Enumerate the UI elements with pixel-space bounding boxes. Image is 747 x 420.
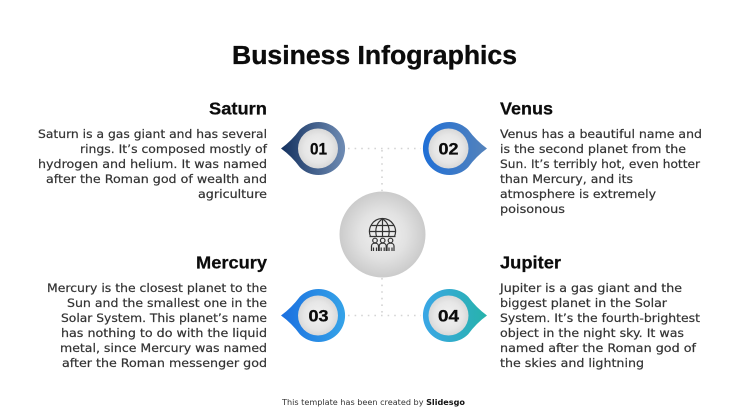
panel: Mercury: Mercury — [196, 252, 267, 272]
panel: Venus: poisonous — [500, 202, 565, 216]
marker 01 — [281, 122, 345, 175]
dotted connectors — [348, 148, 421, 316]
panel: Jupiter: object in the night sky. It was — [500, 326, 684, 340]
panel: Jupiter: biggest planet in the Solar — [500, 296, 667, 310]
panel: Saturn — [38, 98, 268, 201]
marker 02: 02 — [438, 140, 458, 158]
panel: Saturn: Saturn — [209, 98, 267, 118]
panel: Jupiter: Jupiter is a gas giant and the — [499, 281, 682, 295]
panel: Mercury: after the Roman messenger god — [62, 356, 267, 370]
panel: Jupiter: Jupiter — [500, 252, 561, 272]
title: Business Infographics — [232, 42, 517, 70]
marker 01: 01 — [310, 140, 327, 158]
panel: Venus: Sun. It’s terribly hot, even hotter — [500, 157, 700, 171]
marker 04: 04 — [438, 306, 460, 326]
panel: Jupiter: System. It’s the fourth-brightest — [500, 311, 701, 325]
marker 04 — [423, 289, 487, 342]
panel: Mercury — [47, 252, 267, 370]
panel: Mercury: metal, since Mercury was named — [60, 341, 267, 355]
marker 03: 03 — [308, 306, 328, 326]
panel: Jupiter — [499, 252, 701, 370]
panel: Venus — [500, 98, 702, 216]
center circle with globe and people icon — [340, 192, 426, 278]
panel: Jupiter: the skies and lightning — [500, 356, 644, 370]
icon: globe and people — [370, 218, 396, 251]
marker 02 — [423, 122, 487, 175]
panel: Venus: atmosphere is extremely — [500, 187, 656, 201]
panel: Mercury: has nothing to do with the liquid — [61, 326, 267, 340]
panel: Venus: Venus has a beautiful name and — [500, 127, 702, 141]
panel: Mercury: Sun and the smallest one in the — [67, 296, 267, 310]
panel: Mercury: Mercury is the closest planet to the — [47, 281, 267, 295]
panel: Saturn: agriculture — [198, 187, 267, 201]
panel: Saturn: after the Roman god of wealth and — [46, 172, 267, 186]
marker 03 — [281, 289, 345, 342]
footer credit: This template has been created by Slidesgo — [281, 398, 465, 407]
panel: Saturn: hydrogen and helium. It was named — [38, 157, 267, 171]
panel: Venus: than Mercury, and its — [500, 172, 633, 186]
panel: Mercury: Solar System. This planet’s name — [61, 311, 267, 325]
panel: Saturn: rings. It’s composed mostly of — [80, 142, 268, 156]
panel: Saturn: Saturn is a gas giant and has several — [38, 127, 267, 141]
panel: Venus: is the second planet from the — [500, 142, 686, 156]
panel: Venus: Venus — [500, 98, 553, 118]
panel: Jupiter: named after the Roman god of — [500, 341, 697, 355]
